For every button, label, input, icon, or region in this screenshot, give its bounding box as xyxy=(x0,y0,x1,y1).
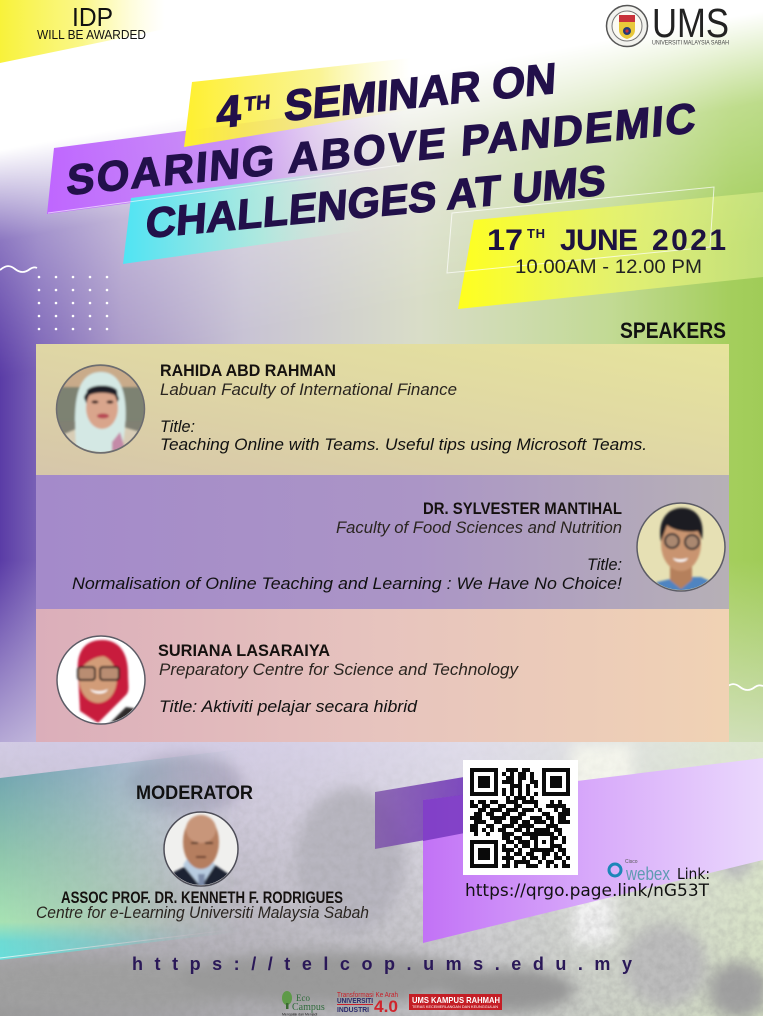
panel: speaker 2 xyxy=(36,475,731,609)
IDP award note xyxy=(37,2,146,42)
title: CHALLENGES AT UMS xyxy=(144,156,607,247)
logo: Universiti Industri 4.0: UNIVERSITI xyxy=(337,998,373,1005)
date band xyxy=(458,192,763,309)
title background bands xyxy=(47,57,420,264)
title xyxy=(65,54,697,247)
UMS logo: UNIVERSITI MALAYSIA SABAH xyxy=(652,40,729,46)
moderator heading: MODERATOR xyxy=(136,782,253,804)
moderator details: Centre for e-Learning Universiti Malaysia Sabah xyxy=(36,903,369,922)
logo: Universiti Industri 4.0: 4.0 xyxy=(374,997,398,1016)
portrait: Suriana xyxy=(57,636,150,727)
speaker 2 text: Title: xyxy=(587,555,622,574)
speaker 3 text: Title: Aktiviti pelajar secara hibrid xyxy=(159,697,418,716)
logo: Universiti Industri 4.0: Transformasi Ke Arah xyxy=(337,992,398,999)
speaker 2 text: Faculty of Food Sciences and Nutrition xyxy=(336,518,622,537)
date and time: 2021 xyxy=(652,224,726,257)
date and time: TH xyxy=(527,226,545,241)
speaker 3 text: Preparatory Centre for Science and Technology xyxy=(159,660,519,679)
icon: university crest xyxy=(606,6,648,46)
webex link: webex xyxy=(625,864,670,884)
background xyxy=(0,18,763,742)
logo: Eco Campus xyxy=(282,991,325,1016)
portrait: moderator xyxy=(164,812,238,890)
portrait: Sylvester xyxy=(636,502,726,592)
speaker 2 text: Normalisation of Online Teaching and Learning : We Have No Choice! xyxy=(72,574,622,593)
panel: speaker 1 xyxy=(36,344,729,475)
speakers heading: SPEAKERS xyxy=(620,318,726,343)
partner logos xyxy=(282,991,502,1016)
title: SEMINAR ON xyxy=(283,55,557,131)
date and time xyxy=(487,224,726,278)
icon: webex xyxy=(609,864,621,876)
panel: speaker 3 xyxy=(36,609,729,742)
webex link: https://qrgo.page.link/nG53T xyxy=(465,881,710,901)
decoration: purple QR panel xyxy=(375,758,763,943)
decoration: yellow corner band xyxy=(0,0,165,63)
background photo: campus trees xyxy=(0,742,763,1016)
UMS logo: UMS xyxy=(652,0,729,46)
logo: Universiti Industri 4.0: INDUSTRI xyxy=(337,1007,369,1014)
webex link: Link: xyxy=(677,865,710,883)
logo: Eco Campus: Campus xyxy=(292,1002,325,1013)
speaker 1 text xyxy=(160,362,647,454)
date and time: 10.00AM - 12.00 PM xyxy=(515,256,702,278)
title: TH xyxy=(243,91,271,116)
speaker 2 text: DR. SYLVESTER MANTIHAL xyxy=(423,500,622,518)
date and time: JUNE xyxy=(560,224,638,257)
logo: UMS Kampus Rahmah: UMS KAMPUS RAHMAH xyxy=(412,995,500,1005)
speaker 1 text: Title: xyxy=(160,417,195,436)
QR code xyxy=(463,760,578,875)
speaker 1 text: Labuan Faculty of International Finance xyxy=(160,380,457,399)
speaker 3 text xyxy=(158,642,519,716)
speaker 1 text: Teaching Online with Teams. Useful tips using Microsoft Teams. xyxy=(160,435,647,454)
webex link: Cisco xyxy=(625,859,638,865)
logo: UMS Kampus Rahmah xyxy=(409,994,502,1010)
speaker 2 text xyxy=(72,500,622,593)
speaker 1 text: RAHIDA ABD RAHMAN xyxy=(160,362,336,380)
logo: Universiti Industri 4.0 xyxy=(337,992,398,1016)
moderator details xyxy=(36,889,369,922)
website URL: https://telcop.ums.edu.my xyxy=(132,954,632,974)
moderator details: ASSOC PROF. DR. KENNETH F. RODRIGUES xyxy=(61,889,343,907)
IDP award note: WILL BE AWARDED xyxy=(37,28,146,42)
UMS logo xyxy=(606,0,729,46)
IDP award note: IDP xyxy=(72,2,113,32)
webex link xyxy=(465,859,710,901)
portrait: Rahida xyxy=(56,365,144,454)
thin outline frame xyxy=(447,187,714,273)
decoration: left gradient band xyxy=(0,754,204,960)
date and time: 17 xyxy=(487,224,523,257)
title: 4 xyxy=(215,86,243,138)
logo: UMS Kampus Rahmah: TERAS KECEMERLANGAN DAN KEUNGGULAN xyxy=(412,1005,499,1009)
title: SOARING ABOVE PANDEMIC xyxy=(65,94,697,204)
speaker 3 text: SURIANA LASARAIYA xyxy=(158,642,330,660)
decoration: wave and dots xyxy=(0,266,763,690)
logo: Eco Campus: Eco xyxy=(296,993,310,1003)
